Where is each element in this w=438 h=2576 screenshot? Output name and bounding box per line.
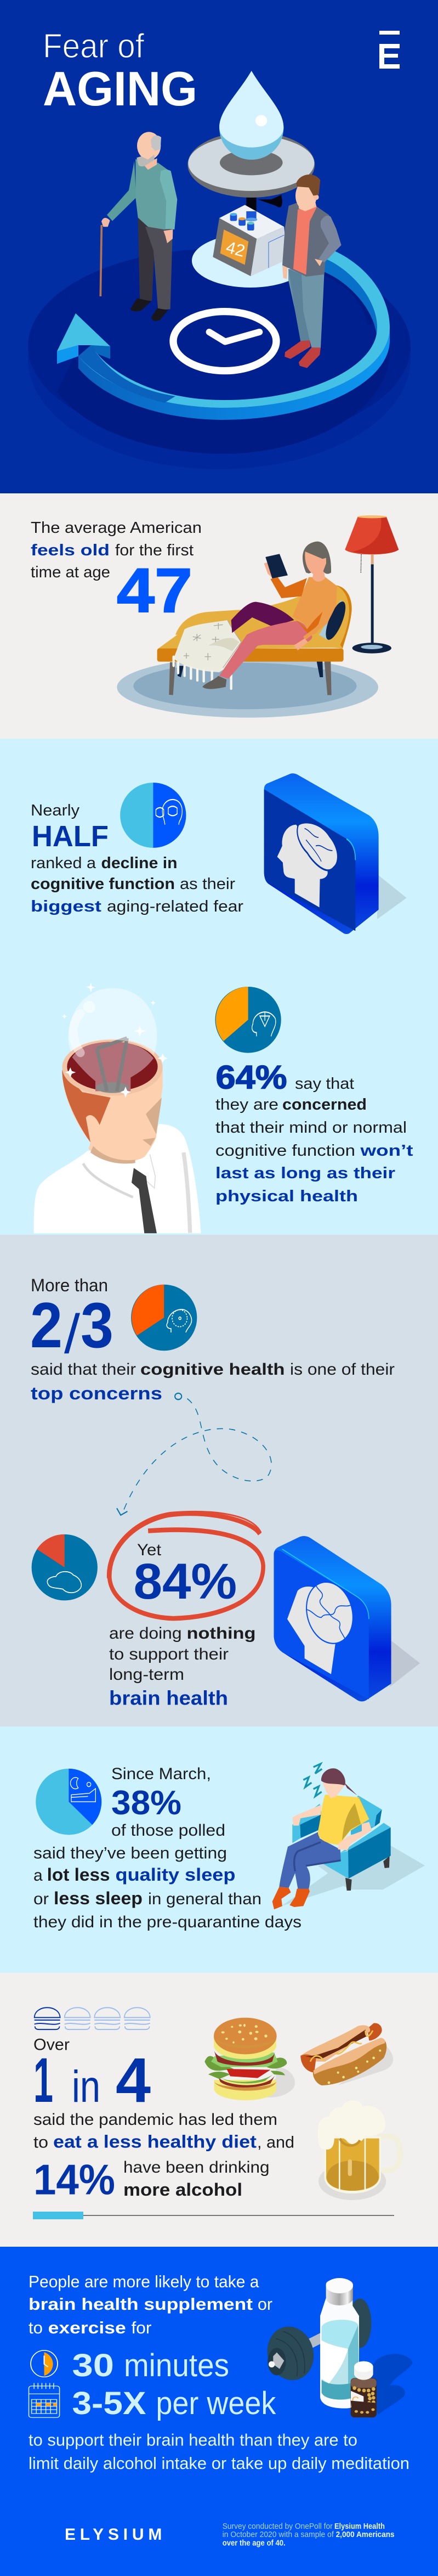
- icon: clock half orange: [31, 2350, 58, 2377]
- text: 64 percent: cognitive function: [215, 1142, 355, 1160]
- panel: sleep: [0, 1726, 438, 1973]
- text: 38 percent sleep: a: [33, 1866, 43, 1885]
- panel: feels old at 47: [0, 493, 438, 739]
- illustration: aging machine: 42: [224, 238, 247, 261]
- text: 64 percent: [215, 1059, 413, 1205]
- text: nearly half: Nearly: [31, 802, 80, 819]
- text: 38 percent sleep: 38%: [111, 1784, 181, 1822]
- icon: calendar: [29, 2383, 60, 2417]
- text: supplements: [29, 2272, 272, 2337]
- platform disc: [28, 249, 411, 469]
- text: survey source: Survey conducted by OnePoll for: [223, 2522, 333, 2531]
- text: 64 percent: that their mind or normal: [215, 1119, 407, 1137]
- illustration: burger: [204, 2018, 295, 2100]
- illustration: old man with cane: [100, 132, 177, 321]
- text: one in four: 14%: [33, 2156, 115, 2204]
- text: feels old: The average American: [31, 519, 202, 537]
- text: 38 percent sleep: Since March,: [111, 1765, 211, 1783]
- text: 38 percent sleep: said they’ve been getting: [33, 1844, 227, 1863]
- text: one in four: 1: [33, 2045, 53, 2116]
- text: one in four: Over: [33, 2036, 70, 2054]
- title: [43, 27, 197, 116]
- illustration: woman reading on sofa: [117, 515, 399, 718]
- text: supplements: brain health supplement: [29, 2294, 253, 2314]
- text: more than 2/3: [30, 1275, 395, 1403]
- text: one in four: , and: [257, 2134, 294, 2151]
- panel: supplements and exercise: [0, 2247, 438, 2576]
- text: nearly half: HALF: [32, 820, 109, 853]
- text: one in four: more alcohol: [123, 2180, 242, 2200]
- text: nearly half: aging-related fear: [107, 898, 243, 915]
- text: 38 percent sleep: of those polled: [111, 1821, 225, 1840]
- text: 38 percent sleep: lot less: [47, 1865, 110, 1885]
- text: one in four: 4: [116, 2045, 151, 2116]
- illustration: dumbbell bottle and pills: C: [352, 2394, 359, 2406]
- title: AGING: [43, 61, 197, 116]
- text: 64 percent: 64%: [216, 1059, 287, 1095]
- text: one in four: eat a less healthy diet: [53, 2131, 257, 2151]
- panel: header: [0, 0, 438, 493]
- text: yet 84 percent: brain health: [109, 1687, 228, 1709]
- text: 38 percent sleep: less sleep: [54, 1888, 143, 1908]
- text: yet 84 percent: are doing: [109, 1624, 182, 1643]
- text: 30 minutes: 30: [72, 2348, 114, 2383]
- panel: cognitive function fears: [0, 739, 438, 1235]
- text: 64 percent: physical health: [215, 1188, 358, 1205]
- pie chart: half: [120, 783, 186, 848]
- illustration: water drop: [219, 71, 283, 160]
- illustration: dumbbell bottle and pills: [261, 2278, 413, 2417]
- text: one in four: [33, 2036, 294, 2204]
- text: 3-5x per week: per week: [156, 2386, 276, 2421]
- text: 64 percent: say that: [295, 1075, 354, 1093]
- text: feels old: feels old: [31, 542, 110, 559]
- text: supplements: for: [132, 2318, 151, 2337]
- divider bar: [33, 2212, 394, 2219]
- text: more than 2/3: /: [64, 1303, 80, 1365]
- logo: Elysium wordmark: ELYSIUM: [65, 2526, 162, 2544]
- text: yet 84 percent: long-term: [109, 1666, 184, 1684]
- illustration: clock: [173, 312, 276, 371]
- text: yet 84 percent: Yet: [137, 1541, 162, 1559]
- panel: two thirds and 84 percent: [0, 1235, 438, 1726]
- text: one in four: said the pandemic has led them: [33, 2111, 277, 2129]
- text: one in four: have been drinking: [123, 2158, 270, 2176]
- text: yet 84 percent: to support their: [109, 1645, 229, 1663]
- text: feels old: time at age: [31, 564, 110, 581]
- pie chart: 38 percent: [36, 1769, 102, 1835]
- text: nearly half: ranked a: [31, 854, 96, 872]
- text: one in four: in: [72, 2062, 100, 2112]
- text: nearly half: cognitive function: [31, 875, 175, 893]
- logo: E mark: [379, 31, 400, 69]
- illustration: head with light bulb: [34, 982, 201, 1233]
- text: 30 minutes: minutes: [124, 2348, 229, 2383]
- text: brain health comparison: limit daily alcohol intake or take up daily meditation: [29, 2454, 409, 2473]
- text: one in four: to: [33, 2134, 48, 2151]
- pie chart: 84 percent: [32, 1534, 98, 1600]
- text: 64 percent: concerned: [282, 1096, 367, 1113]
- text: 38 percent sleep: or: [33, 1890, 49, 1908]
- icon row: burgers: [35, 2007, 150, 2029]
- text: more than 2/3: cognitive health: [140, 1360, 285, 1379]
- text: more than 2/3: 2: [30, 1289, 62, 1361]
- text: 64 percent: won’t: [360, 1142, 413, 1160]
- illustration: aging machine: [187, 132, 315, 288]
- text: 3-5x per week: [72, 2386, 276, 2421]
- text: yet 84 percent: 84%: [134, 1554, 237, 1610]
- pie chart: 64 percent: [215, 987, 281, 1053]
- text: supplements: or: [258, 2294, 272, 2314]
- text: 38 percent sleep: they did in the pre-quarantine days: [33, 1913, 302, 1931]
- text: survey source: over the age of 40.: [223, 2539, 286, 2547]
- icon: puzzle head cube: [274, 1536, 420, 1701]
- text: more than 2/3: top concerns: [31, 1383, 162, 1403]
- text: supplements: exercise: [48, 2318, 126, 2337]
- title: Fear of: [43, 27, 145, 65]
- text: yet 84 percent: [109, 1541, 255, 1709]
- text: feels old: for the first: [115, 542, 194, 559]
- text: survey source: 2,000 Americans: [336, 2530, 395, 2539]
- text: nearly half: as their: [180, 875, 235, 893]
- illustration: beer mug: [318, 2100, 400, 2200]
- text: 64 percent: last as long as their: [215, 1165, 395, 1182]
- icon: brain head cube: [264, 773, 407, 934]
- text: feels old: [31, 519, 202, 581]
- big number 47: 47: [117, 556, 192, 626]
- illustration: hot dog: [300, 2023, 393, 2085]
- text: 64 percent: they are: [215, 1096, 278, 1113]
- dashed arrow: [117, 1393, 271, 1515]
- text: more than 2/3: said that their: [31, 1360, 136, 1379]
- text: 38 percent sleep: [33, 1765, 302, 1931]
- text: yet 84 percent: nothing: [186, 1624, 255, 1643]
- text: brain health comparison: [29, 2431, 409, 2473]
- text: brain health comparison: to support their brain health than they are to: [29, 2431, 357, 2450]
- text: 3-5x per week: 3-5X: [72, 2386, 146, 2421]
- text: 30 minutes: [72, 2348, 229, 2383]
- text: 38 percent sleep: quality sleep: [115, 1865, 236, 1885]
- illustration: woman asleep in armchair: [272, 1764, 425, 1909]
- text: nearly half: [31, 802, 243, 915]
- callout: red scribble circle: [107, 1511, 263, 1618]
- text: nearly half: biggest: [31, 898, 101, 915]
- illustration: younger man: [282, 175, 342, 368]
- text: more than 2/3: More than: [31, 1275, 108, 1295]
- text: 38 percent sleep: in general than: [148, 1890, 261, 1908]
- text: supplements: People are more likely to take a: [29, 2272, 259, 2291]
- text: more than 2/3: is one of their: [290, 1360, 395, 1379]
- text: survey source: Elysium Health: [334, 2522, 385, 2531]
- text: supplements: to: [29, 2318, 43, 2337]
- circular arrow: [57, 248, 390, 420]
- text: more than 2/3: 3: [81, 1289, 113, 1361]
- text: survey source: [223, 2522, 395, 2547]
- text: survey source: in October 2020 with a sample of: [223, 2530, 334, 2539]
- panel: diet and alcohol: [0, 1973, 438, 2247]
- text: nearly half: decline in: [101, 854, 178, 872]
- pie chart: two thirds: [131, 1285, 197, 1351]
